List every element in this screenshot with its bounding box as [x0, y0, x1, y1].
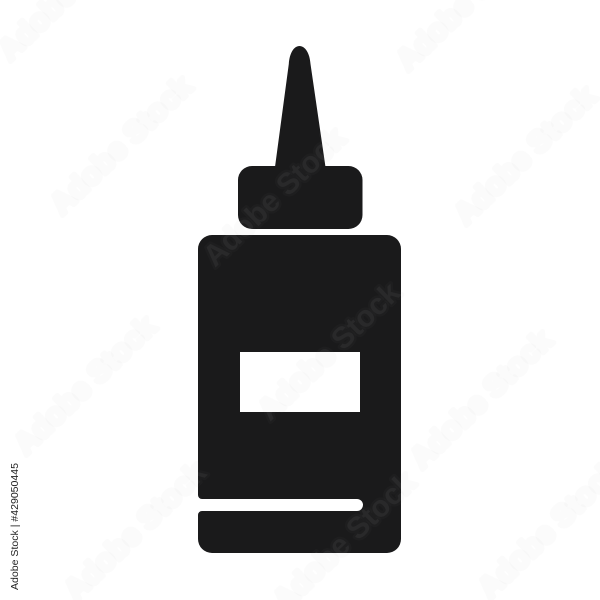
stock credit text: Adobe Stock | #429050445: [9, 463, 21, 590]
watermark pattern: Adobe Stock: [44, 70, 199, 221]
watermark pattern: Adobe Stock: [8, 310, 163, 461]
bottle body with label and slot cut-outs: [198, 235, 401, 553]
watermark pattern: Adobe Stock: [448, 80, 600, 231]
bottle nozzle: [275, 46, 326, 167]
watermark pattern: Adobe Stock: [197, 122, 352, 273]
bottle label: [240, 352, 360, 412]
watermark pattern: Adobe Stock: [404, 324, 559, 475]
icon: glue bottle: [198, 46, 401, 553]
bottle cap: [238, 166, 362, 229]
watermark pattern: Adobe Stock: [252, 276, 407, 427]
